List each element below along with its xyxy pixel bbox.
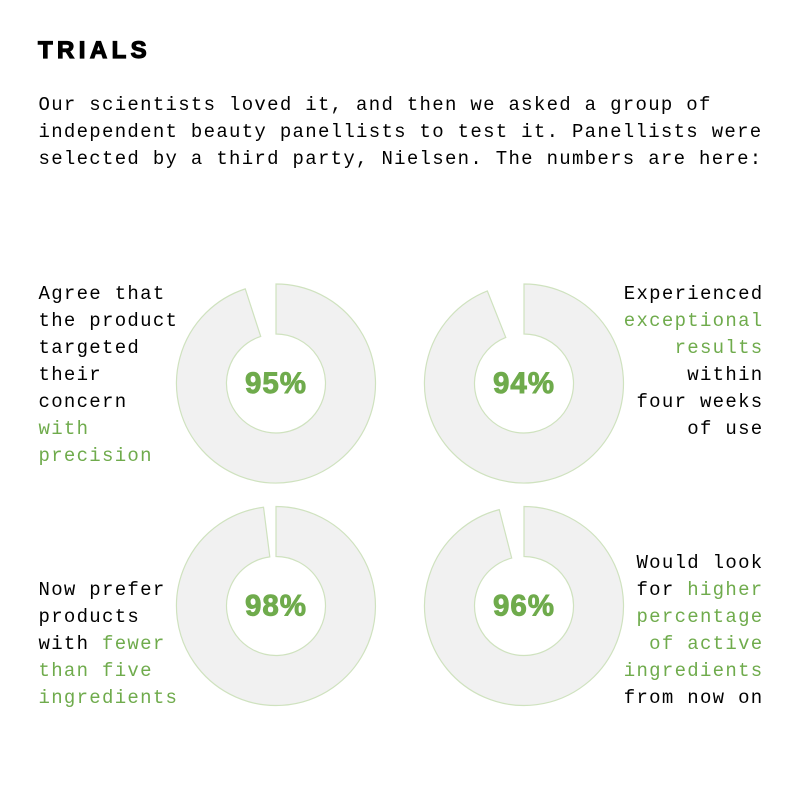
text: 95% statement: Agree that the product targeted their concern with precision [38,283,178,467]
donut chart: 96% [425,506,624,706]
text: 98% statement: Now prefer products with fewer than five ingredients [38,579,178,709]
title: TRIALS [38,37,151,64]
text: 96% statement: Would look for higher percentage of active ingredients from now on [624,552,764,709]
donut chart: 95% [176,284,375,483]
intro text: Our scientists loved it, and then we asked a group of independent beauty panellists to test it. Panellists were selected by a third party, Nielsen. The numbers are here: [38,94,763,170]
text: 94% statement: Experienced exceptional results within four weeks of use [624,283,764,440]
donut chart: 98%: 98% [245,590,307,622]
donut chart: 98% [176,506,375,706]
donut chart: 94% [424,284,623,483]
donut chart: 94%: 94% [493,367,555,400]
donut chart: 95%: 95% [245,367,307,400]
donut chart: 96%: 96% [493,590,555,622]
